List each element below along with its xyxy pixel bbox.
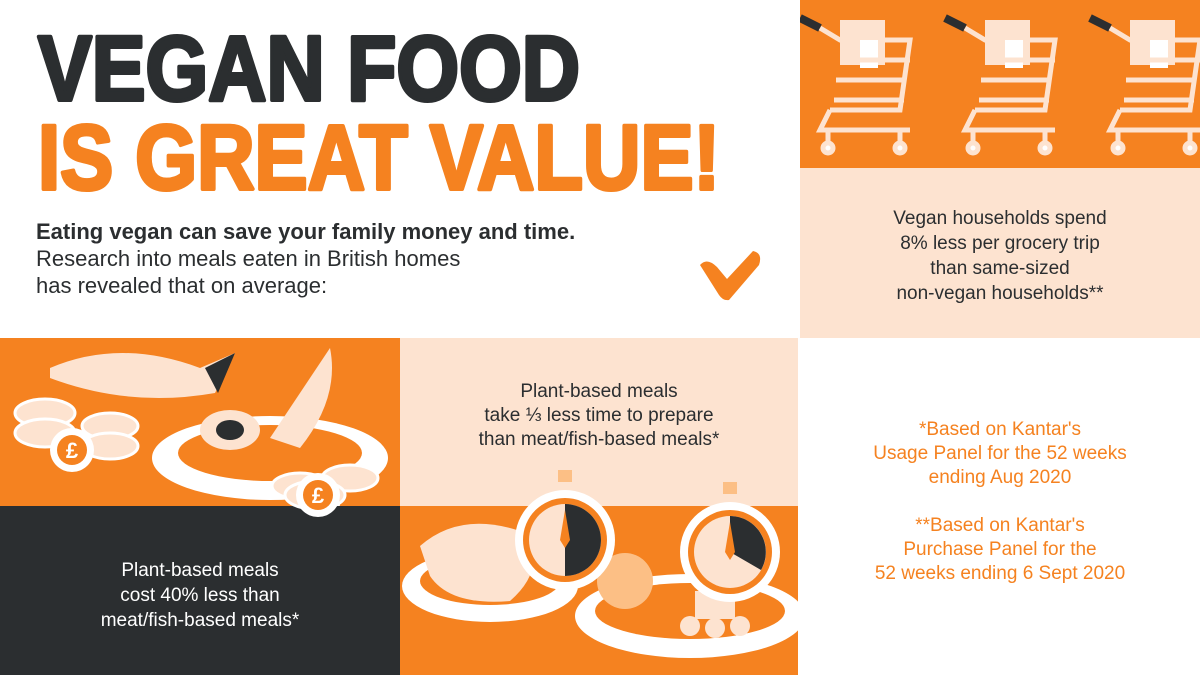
- intro text: Research into meals eaten in British homes: [36, 246, 460, 271]
- panel: households: [800, 168, 1200, 338]
- icon: heart check: [700, 251, 760, 300]
- coins overlapping: [284, 473, 346, 517]
- panel: time text: [400, 338, 798, 506]
- intro text: has revealed that on average:: [36, 273, 327, 298]
- panel: households: Vegan households spend: [893, 208, 1107, 229]
- footnotes: ending Aug 2020: [929, 467, 1071, 488]
- panel: time text: than meat/fish-based meals*: [479, 429, 719, 450]
- panel: cost illustration: [0, 338, 400, 506]
- intro text: [36, 219, 575, 298]
- footnotes: Usage Panel for the 52 weeks: [873, 443, 1127, 464]
- panel: time text: take ⅓ less time to prepare: [484, 405, 714, 426]
- icon: stopwatch 2: [680, 482, 780, 602]
- footnotes: **Based on Kantar's: [915, 515, 1085, 536]
- panel: cost illustration: £: [66, 438, 79, 463]
- panel: carts: [800, 0, 1200, 168]
- panel: time illustration: [400, 506, 798, 675]
- panel: households: non-vegan households**: [896, 283, 1104, 304]
- panel: cost illustration: £: [312, 491, 325, 516]
- footnotes: 52 weeks ending 6 Sept 2020: [875, 563, 1125, 584]
- title: VEGAN FOOD: [38, 18, 580, 120]
- footnotes: Purchase Panel for the: [903, 539, 1097, 560]
- footnotes: [873, 419, 1127, 584]
- intro text: Eating vegan can save your family money and time.: [36, 219, 575, 244]
- coins overlapping: £: [312, 483, 325, 508]
- panel: cost text: meat/fish-based meals*: [101, 610, 299, 631]
- icon: stopwatch 1: [515, 470, 615, 590]
- panel: cost text: [0, 506, 400, 675]
- panel: households: than same-sized: [930, 258, 1070, 279]
- panel: households: 8% less per grocery trip: [900, 233, 1100, 254]
- footnotes: *Based on Kantar's: [919, 419, 1081, 440]
- panel: cost text: Plant-based meals: [121, 560, 279, 581]
- panel: cost text: cost 40% less than: [120, 585, 280, 606]
- panel: time text: Plant-based meals: [520, 381, 678, 402]
- title: [36, 18, 720, 200]
